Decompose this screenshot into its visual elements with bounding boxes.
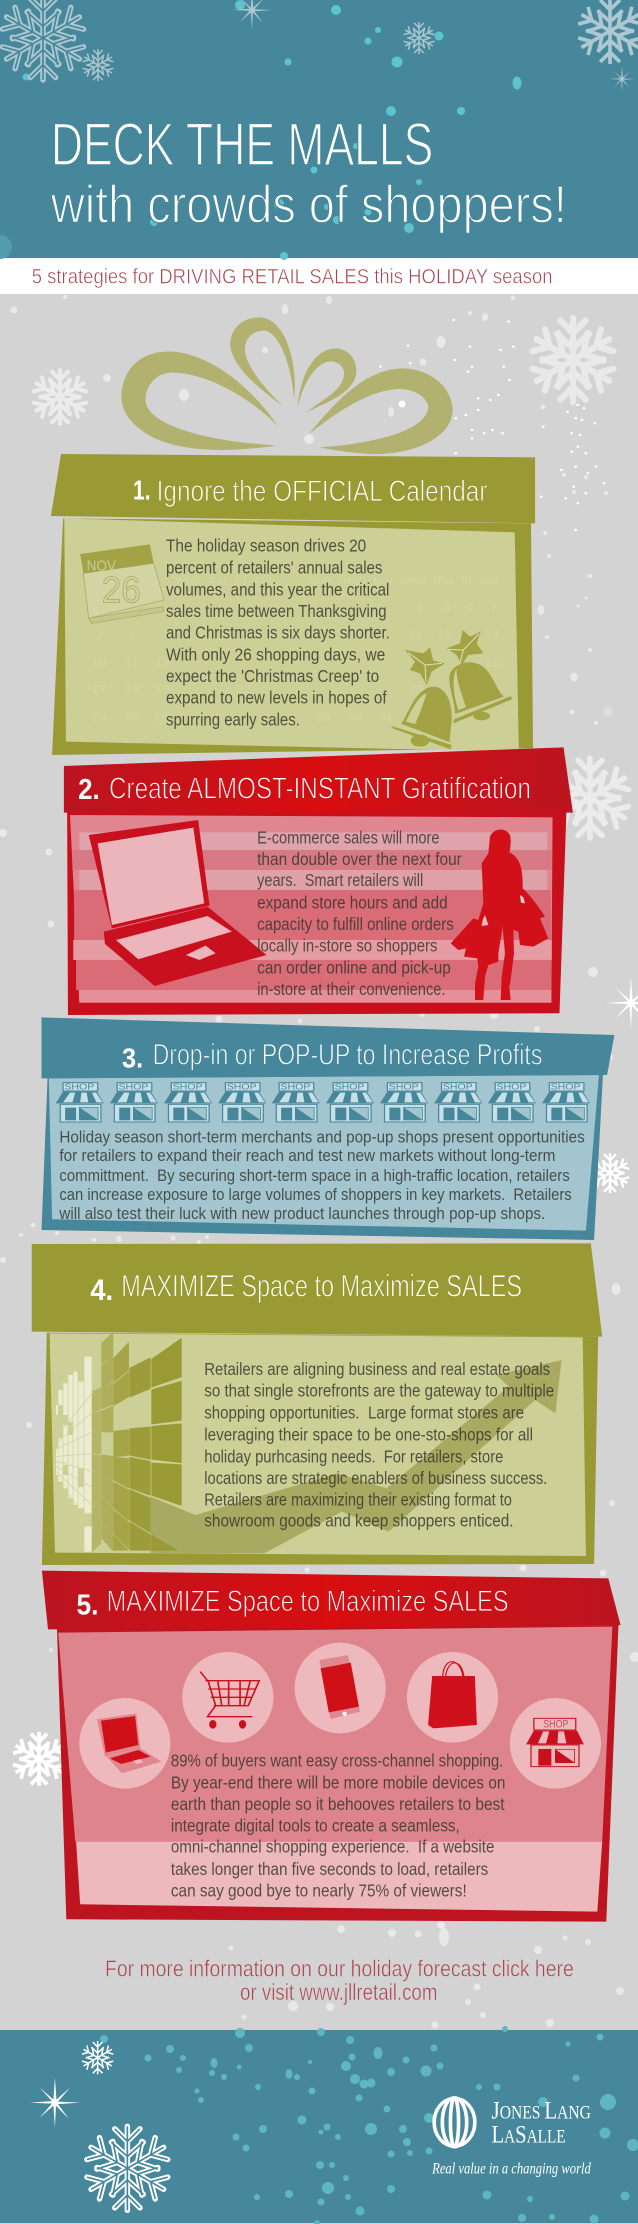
faint calendar grid: 4 [415, 601, 423, 613]
icon: shopping cart circle [182, 1652, 273, 1743]
panel 1 body text: With only 26 shopping days, we [166, 645, 385, 665]
panel 4: maximize space olive [32, 1243, 602, 1565]
panel 2 body text: expand store hours and add [257, 893, 448, 913]
fine white snow speckles [380, 320, 604, 530]
faint calendar grid: 25 [125, 711, 140, 723]
faint calendar grid: 25 [409, 683, 424, 695]
panel 2 pink body [70, 815, 553, 1003]
panel 5 body text: integrate digital tools to create a seamless, [171, 1816, 460, 1836]
faint calendar grid: 14 [484, 628, 500, 641]
faint calendar grid: 30 [348, 711, 363, 723]
panel 5 header [42, 1571, 621, 1629]
panel 5 body text [171, 1751, 505, 1901]
gray area snowflakes [10, 318, 638, 1786]
panel 2 frame [67, 812, 566, 1015]
panel 2 body text: in-store at their convenience. [257, 980, 446, 999]
panel 1 body text: volumes, and this year the critical [166, 580, 389, 600]
perspective grid of tiles [53, 1333, 181, 1552]
faint calendar grid: sun mon tue wed thu fri sat [309, 573, 499, 586]
faint calendar grid: 4 [129, 628, 136, 641]
panel 2 body text: locally in-store so shoppers [257, 936, 437, 956]
icon: laptop circle [79, 1698, 170, 1789]
row of shop icons [56, 1082, 590, 1122]
panel 2 heading number: 2. [78, 773, 100, 805]
panel 5 body text: 89% of buyers want easy cross-channel shopping. [171, 1751, 503, 1771]
row of shop icons: SHOP [551, 1082, 581, 1092]
icon: calendar page [80, 544, 164, 623]
panel 1 heading number: 1. [133, 475, 151, 506]
faint calendar grid: 31 [378, 711, 394, 723]
call to action line 2: or visit www.jllretail.com [240, 1980, 437, 2005]
faint calendar grid: 10 [92, 656, 107, 669]
icon: bells and holly [392, 630, 512, 749]
panel 2 body text: can order online and pick-up [257, 958, 451, 978]
logo: Jones Lang LaSalle: JONES LANG [492, 2097, 591, 2125]
panel 1 frame [52, 518, 533, 755]
title and subtitle [32, 111, 567, 289]
panel 1 pale body [64, 518, 519, 752]
panel 1 body text: expect the 'Christmas Creep' to [166, 667, 379, 686]
panel 2: create almost-instant gratification [64, 747, 573, 1015]
panel 5 body text: takes longer than five seconds to load, retailers [171, 1860, 488, 1879]
panel 2 body text: than double over the next four [257, 850, 462, 869]
panel 5 body text: earth than people so it behooves retailers to best [171, 1795, 505, 1814]
panel 1 body text: sales time between Thanksgiving [166, 602, 387, 621]
panel 1: ignore the official calendar [51, 454, 535, 755]
logo: Jones Lang LaSalle: LASALLE [492, 2121, 566, 2149]
icon: calendar page: NOV [87, 558, 116, 574]
panel 5 frame [57, 1625, 618, 1922]
panel 5 body text: can say good bye to nearly 75% of viewers! [171, 1881, 467, 1901]
panel 4 pale body [50, 1333, 586, 1556]
panel 4 body text: showroom goods and keep shoppers enticed. [204, 1511, 514, 1531]
row of shop icons: SHOP [173, 1082, 203, 1092]
panel 1 body text: spurring early sales. [166, 710, 300, 730]
row of shop icons: SHOP [389, 1082, 419, 1092]
faint calendar grid: wed thu fri sat [174, 573, 273, 586]
panel 5 body text: By year-end there will be more mobile devices on [171, 1773, 505, 1793]
panel 1 body text: The holiday season drives 20 [166, 536, 366, 556]
subtitle strip background [0, 258, 638, 294]
header snow dots [0, 0, 522, 260]
panel 1 body text: expand to new levels in hopes of [166, 688, 387, 708]
panel 3 body text [59, 1128, 585, 1223]
panel 2 body text [257, 828, 462, 999]
panel 2 header [64, 747, 573, 813]
footer band [0, 2030, 638, 2223]
icon: shopping bag circle [407, 1652, 498, 1743]
panel 3 header [42, 1017, 614, 1078]
panel 3: drop-in or pop-up [42, 1017, 614, 1240]
row of shop icons: SHOP [335, 1082, 365, 1092]
row of shop icons: SHOP [443, 1082, 473, 1092]
faint calendar grid: 17 [92, 683, 107, 695]
panel 5: cross-channel [42, 1571, 621, 1922]
faint calendar grid: 12 [155, 656, 170, 669]
icon: woman shopper silhouette [451, 830, 548, 1000]
faint calendar grid: 19 [155, 683, 170, 695]
row of shop icons: SHOP [280, 1082, 310, 1092]
panel 3 pale body [49, 1075, 599, 1231]
icon: storefront circle [510, 1698, 601, 1789]
panel 4 body text [204, 1360, 554, 1531]
footer content [30, 1957, 591, 2210]
panel 4 body text: holiday purhcasing needs. For retailers, store [204, 1447, 503, 1467]
faint calendar grid: 21 [484, 656, 500, 669]
panel 2 body text: E-commerce sales will more [257, 828, 439, 848]
faint calendar grid: 24 [92, 711, 107, 723]
faint calendar grid: 18 [125, 683, 140, 695]
faint calendar grid: 11 [125, 656, 139, 669]
faint calendar grid: 6 [466, 601, 474, 613]
panel 5 body text: omni-channel shopping experience. If a website [171, 1837, 494, 1857]
faint calendar grid: 7 [490, 601, 498, 613]
faint calendar grid: 22 [236, 683, 251, 695]
panel 4 frame [42, 1333, 598, 1565]
panel 1 body text: and Christmas is six days shorter. [166, 623, 390, 643]
gray area snow dots [0, 295, 638, 2028]
footer snow dots [100, 2026, 638, 2224]
faint calendar grid: 12 [437, 628, 453, 641]
panel 1 header [51, 454, 535, 523]
panel 5 pink upper body [58, 1627, 612, 1842]
panel 3 frame [42, 1073, 603, 1240]
icon: storefront circle: SHOP [543, 1718, 568, 1730]
panel 5 pale lower body [76, 1842, 602, 1912]
icon: smartphone circle [295, 1643, 386, 1733]
faint calendar grid [92, 573, 500, 723]
panel 2 body text: capacity to fulfill online orders [257, 915, 454, 934]
row of shop icons: SHOP [496, 1082, 526, 1092]
faint calendar grid: 29 [315, 711, 331, 723]
footer snowflakes [30, 2041, 172, 2210]
panel 5 heading number: 5. [76, 1588, 98, 1621]
panel 2 body text: years. Smart retailers will [257, 871, 423, 890]
faint calendar grid: 26 [154, 711, 169, 723]
header band [0, 0, 638, 258]
gift bow ribbon [121, 317, 453, 454]
panel 2 striped bands [72, 832, 552, 1003]
row of shop icons: SHOP [118, 1082, 148, 1092]
header snowflakes [0, 0, 638, 92]
growth arrow [151, 1360, 562, 1553]
row of shop icons: SHOP [227, 1082, 257, 1092]
logo: Jones Lang LaSalle [431, 2097, 591, 2177]
icon: calendar page: 26 [102, 568, 141, 610]
panel 4 heading number: 4. [90, 1274, 113, 1307]
faint calendar grid: 11 [409, 628, 423, 641]
panel 1 body text: percent of retailers' annual sales [166, 558, 382, 578]
panel 3 heading number: 3. [122, 1042, 143, 1074]
row of shop icons: SHOP [64, 1082, 94, 1092]
faint calendar grid: 5 [443, 601, 450, 613]
icon: laptop [89, 820, 267, 986]
panel 1 heading: Ignore the OFFICIAL Calendar [157, 474, 488, 507]
panel 4 header [32, 1243, 602, 1337]
faint calendar grid: 3 [96, 628, 104, 641]
panel 4 body text: Retailers are maximizing their existing format to [204, 1490, 512, 1510]
panel 1 body text [166, 536, 390, 730]
